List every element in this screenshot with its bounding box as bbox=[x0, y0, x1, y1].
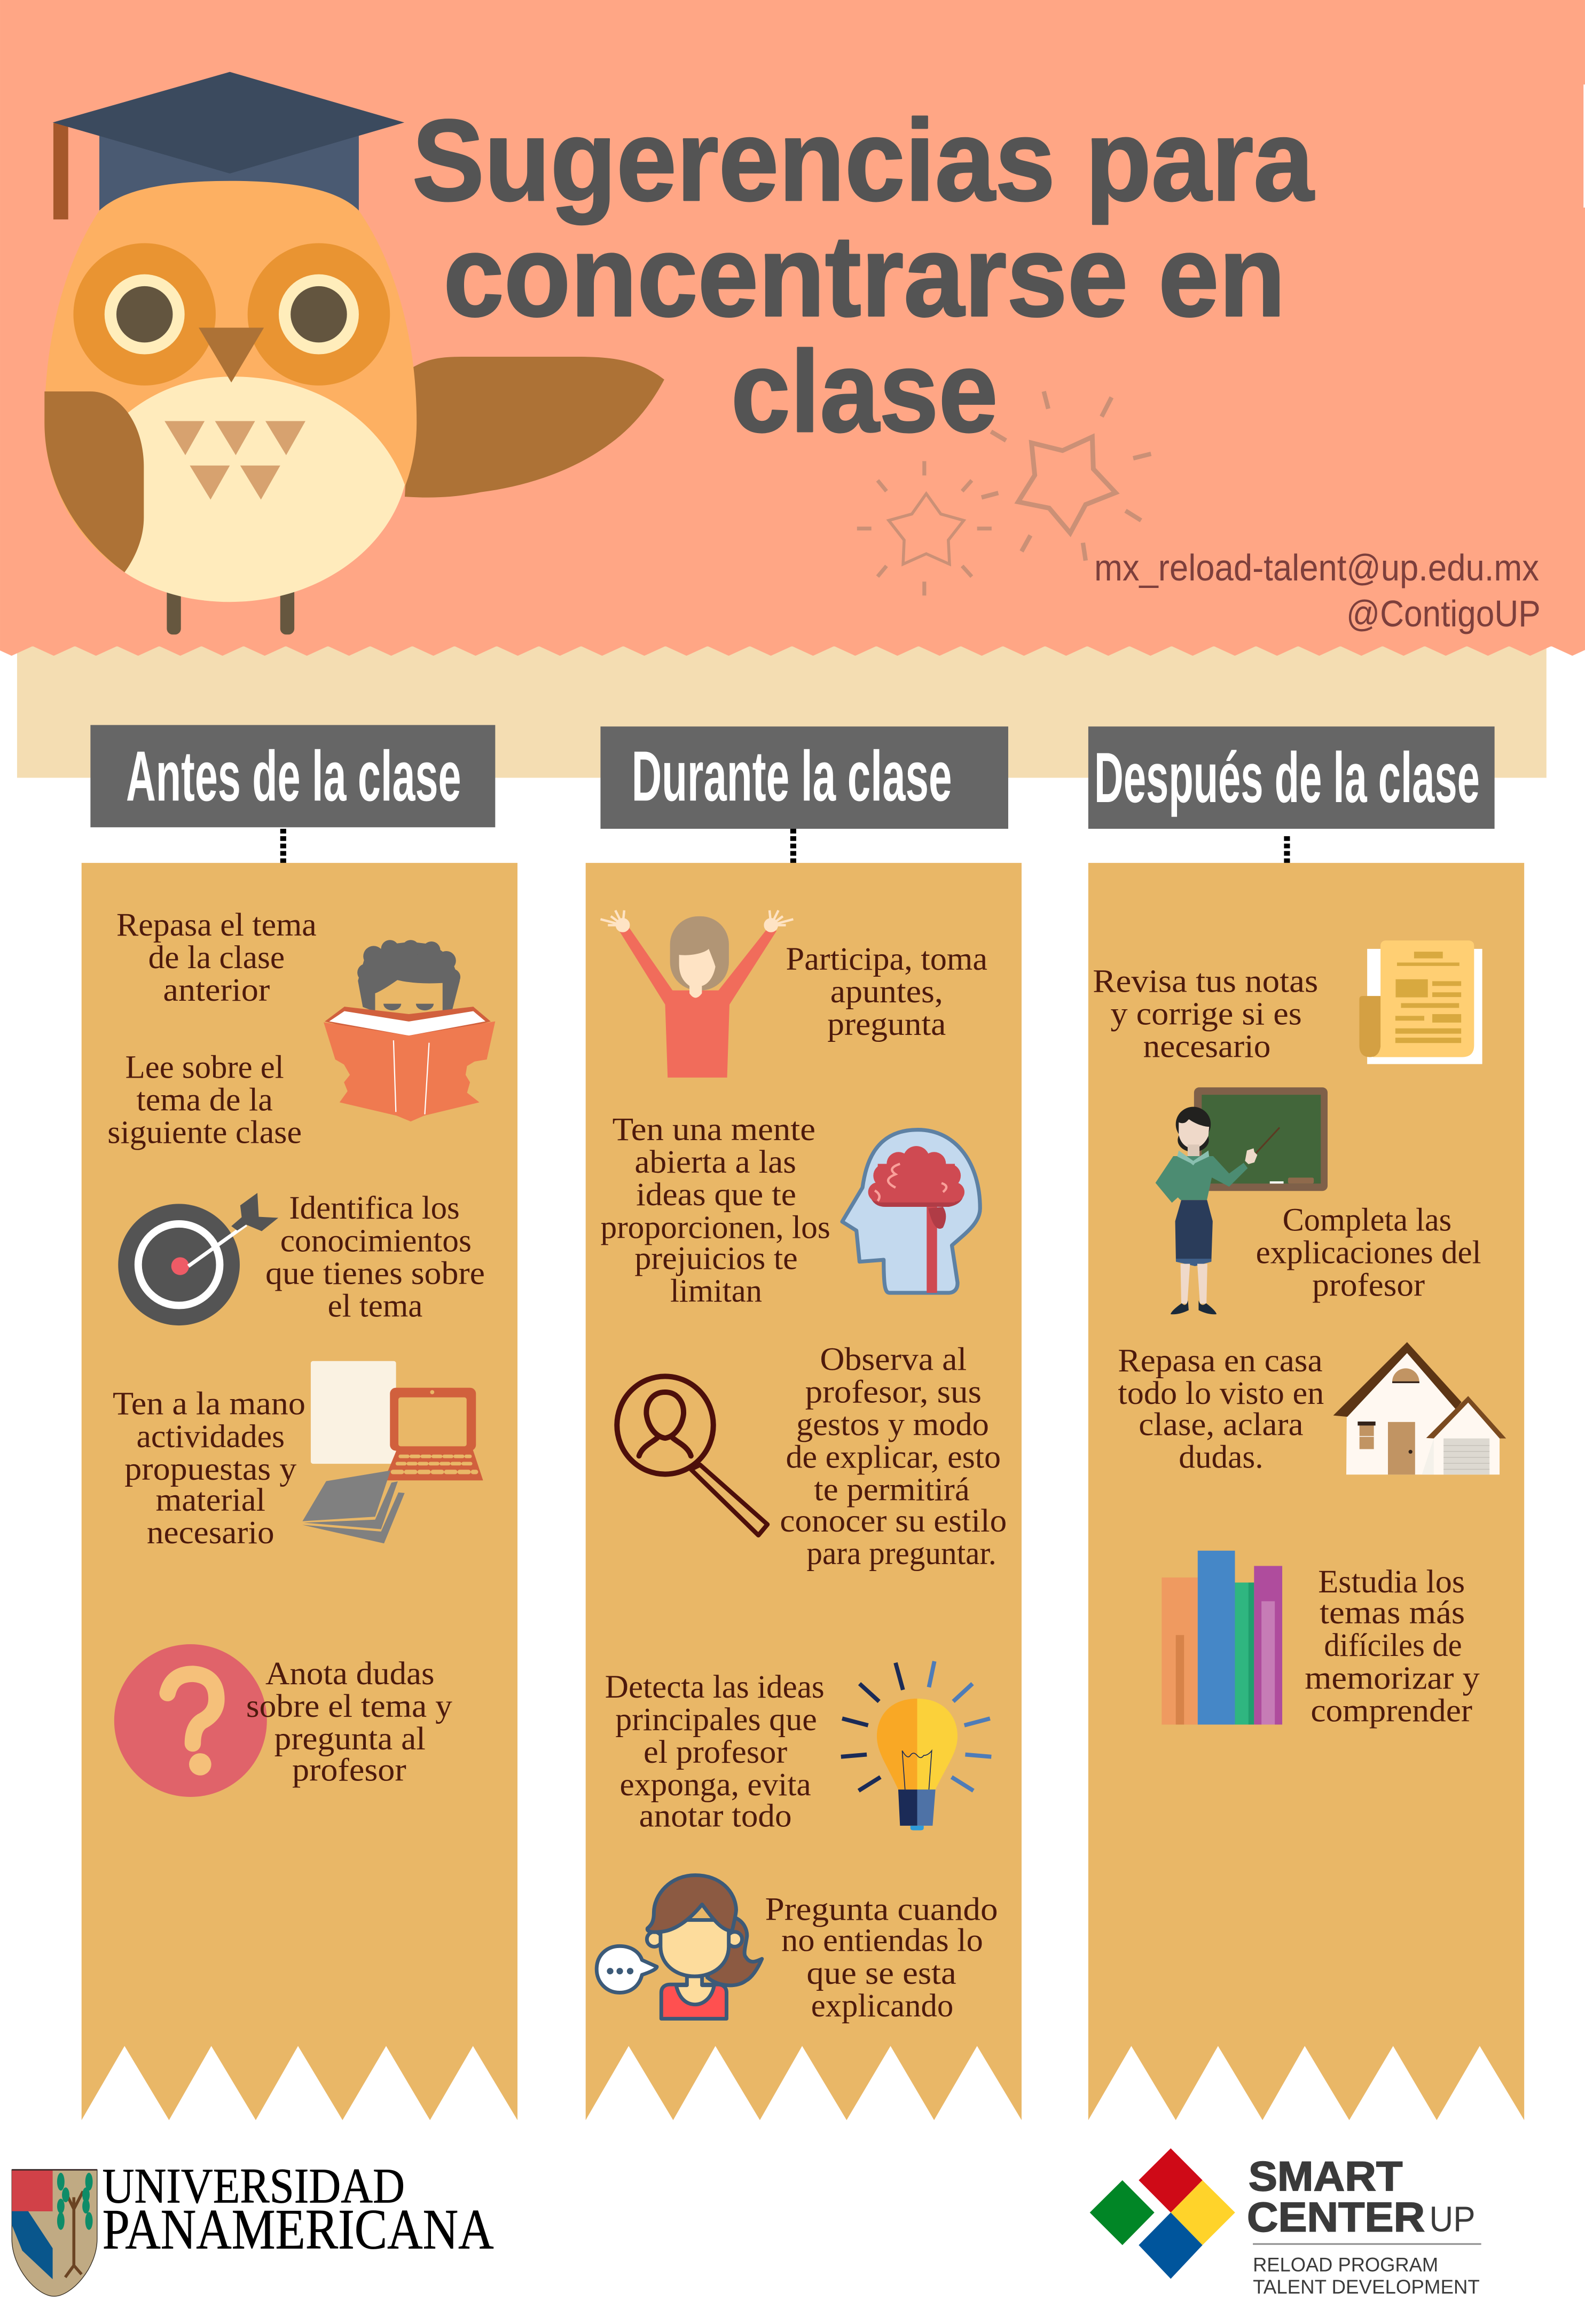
header panel bbox=[0, 0, 1585, 656]
text: detecta las ideas: el profesor bbox=[644, 1734, 787, 1770]
icon: stack of books bbox=[1162, 1551, 1282, 1725]
logo: Smart Center UP bbox=[1090, 2148, 1481, 2298]
text: repasa en casa: dudas. bbox=[1179, 1440, 1264, 1475]
text: detecta las ideas: exponga, evita bbox=[620, 1767, 811, 1803]
owl beak bbox=[199, 328, 264, 382]
text: participa, toma apuntes: apuntes, bbox=[830, 974, 943, 1010]
logo wordmark: SMART bbox=[1249, 2154, 1402, 2200]
text: observa al profesor: para preguntar. bbox=[806, 1536, 996, 1572]
text: observa al profesor: te permitirá bbox=[814, 1472, 970, 1508]
text: detecta las ideas: anotar todo bbox=[639, 1799, 792, 1834]
contact details: mx_reload-talent@up.edu.mx bbox=[1094, 547, 1539, 588]
logo diamonds bbox=[1090, 2148, 1235, 2279]
icon: paper, laptop and notebooks bbox=[302, 1361, 483, 1543]
text: pregunta cuando no entiendas: no entiendas lo bbox=[781, 1923, 983, 1959]
text: identifica los conocimientos: el tema bbox=[328, 1288, 422, 1324]
icon: girl with speech bubble bbox=[597, 1875, 762, 2019]
panel: después de la clase bbox=[1088, 863, 1524, 2120]
text: repasa en casa: todo lo visto en bbox=[1118, 1376, 1324, 1411]
text: repasa en casa: clase, aclara bbox=[1139, 1407, 1303, 1443]
title: concentrarse en bbox=[443, 211, 1285, 340]
cream band behind section headings bbox=[17, 643, 1547, 778]
icon: target with arrow bbox=[118, 1193, 278, 1325]
text: identifica los conocimientos bbox=[265, 1190, 485, 1324]
text: detecta las ideas: Detecta las ideas bbox=[605, 1669, 825, 1705]
text: ten a la mano bbox=[113, 1386, 305, 1551]
text: estudia los temas: Estudia los bbox=[1318, 1564, 1465, 1600]
heading: Antes de la clase: Antes de la clase bbox=[126, 736, 461, 816]
logo wordmark: UP bbox=[1429, 2200, 1476, 2239]
text: completa las explicaciones bbox=[1256, 1202, 1481, 1304]
title: clase bbox=[731, 327, 998, 456]
text: ten a la mano: Ten a la mano bbox=[113, 1386, 305, 1422]
illustration: owl with graduation cap bbox=[44, 72, 664, 634]
text: estudia los temas: memorizar y bbox=[1305, 1660, 1480, 1696]
text: ten una mente abierta: proporcionen, los bbox=[600, 1210, 830, 1245]
logo: Universidad Panamericana bbox=[12, 2158, 494, 2296]
text: repasa el tema bbox=[116, 907, 317, 1008]
icon: sparkling stars bbox=[857, 391, 1151, 595]
heading: Después de la clase bbox=[1088, 726, 1495, 829]
text: ten a la mano: actividades bbox=[136, 1419, 285, 1455]
owl eyes bbox=[73, 243, 390, 386]
icon: question mark circle bbox=[114, 1644, 267, 1797]
text: completa las explicaciones: Completa las bbox=[1283, 1202, 1451, 1238]
owl chest feathers bbox=[164, 421, 305, 500]
text: observa al profesor: profesor, sus bbox=[805, 1374, 982, 1410]
logo wordmark: CENTER bbox=[1247, 2194, 1425, 2240]
text: repasa el tema: anterior bbox=[163, 972, 270, 1008]
heading: Durante la clase: Durante la clase bbox=[632, 736, 952, 816]
heading: Durante la clase bbox=[600, 726, 1008, 829]
text: repasa en casa: Repasa en casa bbox=[1118, 1343, 1323, 1379]
text: anota dudas bbox=[246, 1656, 452, 1788]
text: lee sobre el tema: tema de la bbox=[136, 1082, 273, 1118]
icon: person reading book bbox=[324, 940, 495, 1121]
text: ten una mente abierta: ideas que te bbox=[636, 1177, 796, 1213]
text: anota dudas: pregunta al bbox=[274, 1721, 426, 1757]
logo wordmark bbox=[103, 2158, 494, 2261]
text: identifica los conocimientos: Identifica los bbox=[289, 1190, 460, 1226]
text: ten a la mano: material bbox=[156, 1482, 265, 1518]
text: completa las explicaciones: profesor bbox=[1312, 1268, 1425, 1304]
text: pregunta cuando no entiendas: que se esta bbox=[806, 1956, 956, 1991]
owl body bbox=[44, 181, 417, 602]
heading: Antes de la clase bbox=[90, 725, 495, 827]
text: identifica los conocimientos: que tienes sobre bbox=[265, 1255, 485, 1291]
logo wordmark: RELOAD PROGRAM bbox=[1253, 2253, 1438, 2275]
text: ten una mente abierta: limitan bbox=[670, 1274, 762, 1309]
owl left wing bbox=[44, 391, 144, 572]
text: revisa tus notas: Revisa tus notas bbox=[1093, 963, 1318, 999]
text: ten a la mano: propuestas y bbox=[124, 1451, 297, 1487]
owl right wing bbox=[405, 357, 664, 498]
cap base bbox=[99, 134, 359, 214]
text: estudia los temas bbox=[1305, 1564, 1480, 1729]
logo shield bbox=[12, 2169, 97, 2296]
text: participa, toma apuntes bbox=[786, 941, 987, 1042]
owl belly bbox=[122, 376, 405, 602]
text: lee sobre el tema: siguiente clase bbox=[107, 1115, 302, 1151]
text: pregunta cuando no entiendas: Pregunta cuando bbox=[765, 1891, 998, 1927]
text: revisa tus notas: necesario bbox=[1143, 1029, 1270, 1065]
icon: house bbox=[1333, 1342, 1506, 1474]
icon: woman raising arms bbox=[600, 910, 793, 1078]
icon: head with brain bbox=[842, 1130, 980, 1293]
text: anota dudas: sobre el tema y bbox=[246, 1689, 452, 1724]
text: pregunta cuando no entiendas: explicando bbox=[811, 1988, 953, 2024]
cap top bbox=[53, 72, 404, 174]
text: revisa tus notas: y corrige si es bbox=[1111, 996, 1302, 1032]
text: completa las explicaciones: explicaciones del bbox=[1256, 1235, 1481, 1270]
text: ten una mente abierta: abierta a las bbox=[634, 1144, 796, 1180]
text: detecta las ideas: principales que bbox=[615, 1702, 817, 1738]
contact details bbox=[1094, 547, 1541, 634]
text: participa, toma apuntes: pregunta bbox=[827, 1007, 946, 1042]
text: estudia los temas: comprender bbox=[1311, 1693, 1472, 1729]
text: ten una mente abierta: prejuicios te bbox=[634, 1241, 798, 1277]
text: lee sobre el tema bbox=[107, 1049, 302, 1151]
text: ten una mente abierta bbox=[600, 1112, 830, 1309]
text: observa al profesor: gestos y modo bbox=[796, 1407, 989, 1443]
logo wordmark: PANAMERICANA bbox=[103, 2198, 494, 2261]
text: pregunta cuando no entiendas bbox=[765, 1891, 998, 2024]
title: Sugerencias para bbox=[412, 96, 1314, 225]
panel: durante la clase bbox=[586, 863, 1022, 2120]
text: participa, toma apuntes: Participa, toma bbox=[786, 941, 987, 977]
text: repasa en casa bbox=[1118, 1343, 1324, 1475]
text: anota dudas: Anota dudas bbox=[265, 1656, 435, 1692]
text: ten a la mano: necesario bbox=[147, 1515, 274, 1551]
logo wordmark: UNIVERSIDAD bbox=[103, 2158, 405, 2213]
text: lee sobre el tema: Lee sobre el bbox=[125, 1049, 284, 1085]
logo wordmark bbox=[1247, 2154, 1481, 2298]
text: estudia los temas: temas más bbox=[1320, 1595, 1465, 1631]
icon: teacher at blackboard bbox=[1156, 1087, 1328, 1314]
owl legs bbox=[167, 586, 294, 634]
text: observa al profesor bbox=[780, 1341, 1007, 1572]
text: repasa el tema: de la clase bbox=[148, 940, 285, 976]
text: observa al profesor: conocer su estilo bbox=[780, 1503, 1007, 1539]
icon: newspaper bbox=[1359, 940, 1482, 1064]
text: repasa el tema: Repasa el tema bbox=[116, 907, 317, 943]
text: revisa tus notas bbox=[1093, 963, 1318, 1065]
text: observa al profesor: de explicar, esto bbox=[786, 1440, 1001, 1475]
text: detecta las ideas bbox=[605, 1669, 825, 1834]
text: identifica los conocimientos: conocimientos bbox=[280, 1223, 472, 1259]
contact details: @ContigoUP bbox=[1346, 593, 1541, 634]
text: ten una mente abierta: Ten una mente bbox=[613, 1112, 815, 1148]
logo wordmark: TALENT DEVELOPMENT bbox=[1253, 2275, 1480, 2298]
text: observa al profesor: Observa al bbox=[820, 1341, 967, 1377]
cap tassel bbox=[53, 123, 68, 219]
text: estudia los temas: difíciles de bbox=[1324, 1628, 1462, 1663]
icon: light bulb bbox=[841, 1661, 991, 1830]
text: anota dudas: profesor bbox=[292, 1752, 406, 1788]
icon: magnifying glass with person bbox=[617, 1376, 767, 1535]
panel: antes de la clase bbox=[82, 863, 517, 2120]
title bbox=[412, 96, 1314, 456]
